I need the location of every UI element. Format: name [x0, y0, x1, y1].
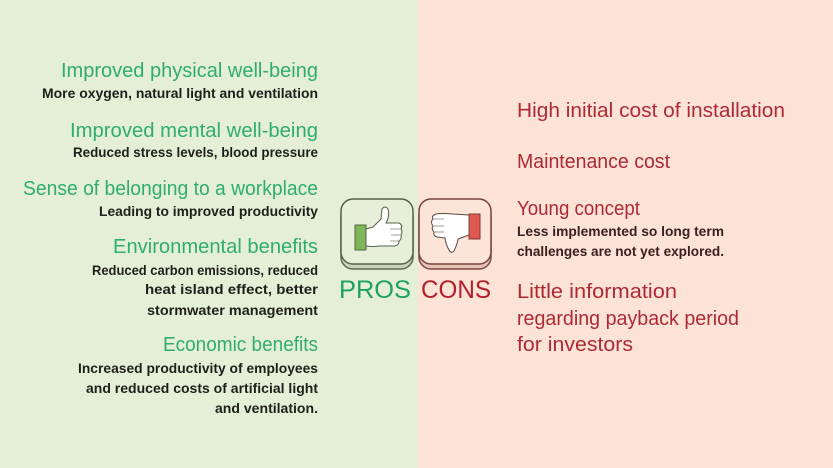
- pro: physical well-being: [42, 60, 318, 101]
- pro: economic benefits: [78, 334, 318, 416]
- heading: PROS: PROS: [339, 276, 411, 304]
- pro: economic benefits: Economic benefits: [163, 334, 318, 356]
- panel: pros background: [0, 0, 418, 468]
- con: young concept: Less implemented so long term: [517, 223, 724, 239]
- pro: sense of belonging: Sense of belonging to a workplace: [23, 178, 318, 200]
- icon: thumbs down: [419, 199, 491, 269]
- con: maintenance: Maintenance cost: [517, 151, 670, 173]
- pro: environmental benefits: Reduced carbon emissions, reduced: [92, 262, 318, 278]
- con: little information: regarding payback period: [517, 308, 739, 330]
- pro: sense of belonging: [23, 178, 318, 219]
- panel: cons background: [418, 0, 833, 468]
- pro: physical well-being: Improved physical well-being: [61, 60, 318, 82]
- pro: physical well-being: More oxygen, natural light and ventilation: [42, 85, 318, 101]
- icon: thumbs up: [341, 199, 413, 269]
- pro: environmental benefits: heat island effect, better: [145, 281, 319, 297]
- pro: mental well-being: Improved mental well-being: [70, 120, 318, 142]
- con: initial cost: High initial cost of installation: [517, 100, 785, 122]
- con: young concept: [517, 198, 724, 259]
- pro: sense of belonging: Leading to improved productivity: [99, 203, 318, 219]
- pro: economic benefits: Increased productivity of employees: [78, 360, 318, 376]
- pro: environmental benefits: Environmental benefits: [113, 236, 318, 258]
- con: little information: Little information: [517, 281, 677, 303]
- pro: economic benefits: and ventilation.: [215, 400, 318, 416]
- pro: mental well-being: [70, 120, 318, 160]
- con: young concept: challenges are not yet explored.: [517, 243, 724, 259]
- con: young concept: Young concept: [517, 198, 640, 220]
- panel: pros list: [23, 60, 319, 416]
- heading: CONS: CONS: [421, 276, 491, 304]
- pro: environmental benefits: stormwater management: [147, 302, 318, 318]
- panel: cons list: [517, 100, 785, 356]
- pro: environmental benefits: [92, 236, 319, 318]
- con: little information: [517, 281, 739, 356]
- pro: economic benefits: and reduced costs of artificial light: [86, 380, 318, 396]
- pro: mental well-being: Reduced stress levels, blood pressure: [73, 144, 318, 160]
- con: little information: for investors: [517, 334, 633, 356]
